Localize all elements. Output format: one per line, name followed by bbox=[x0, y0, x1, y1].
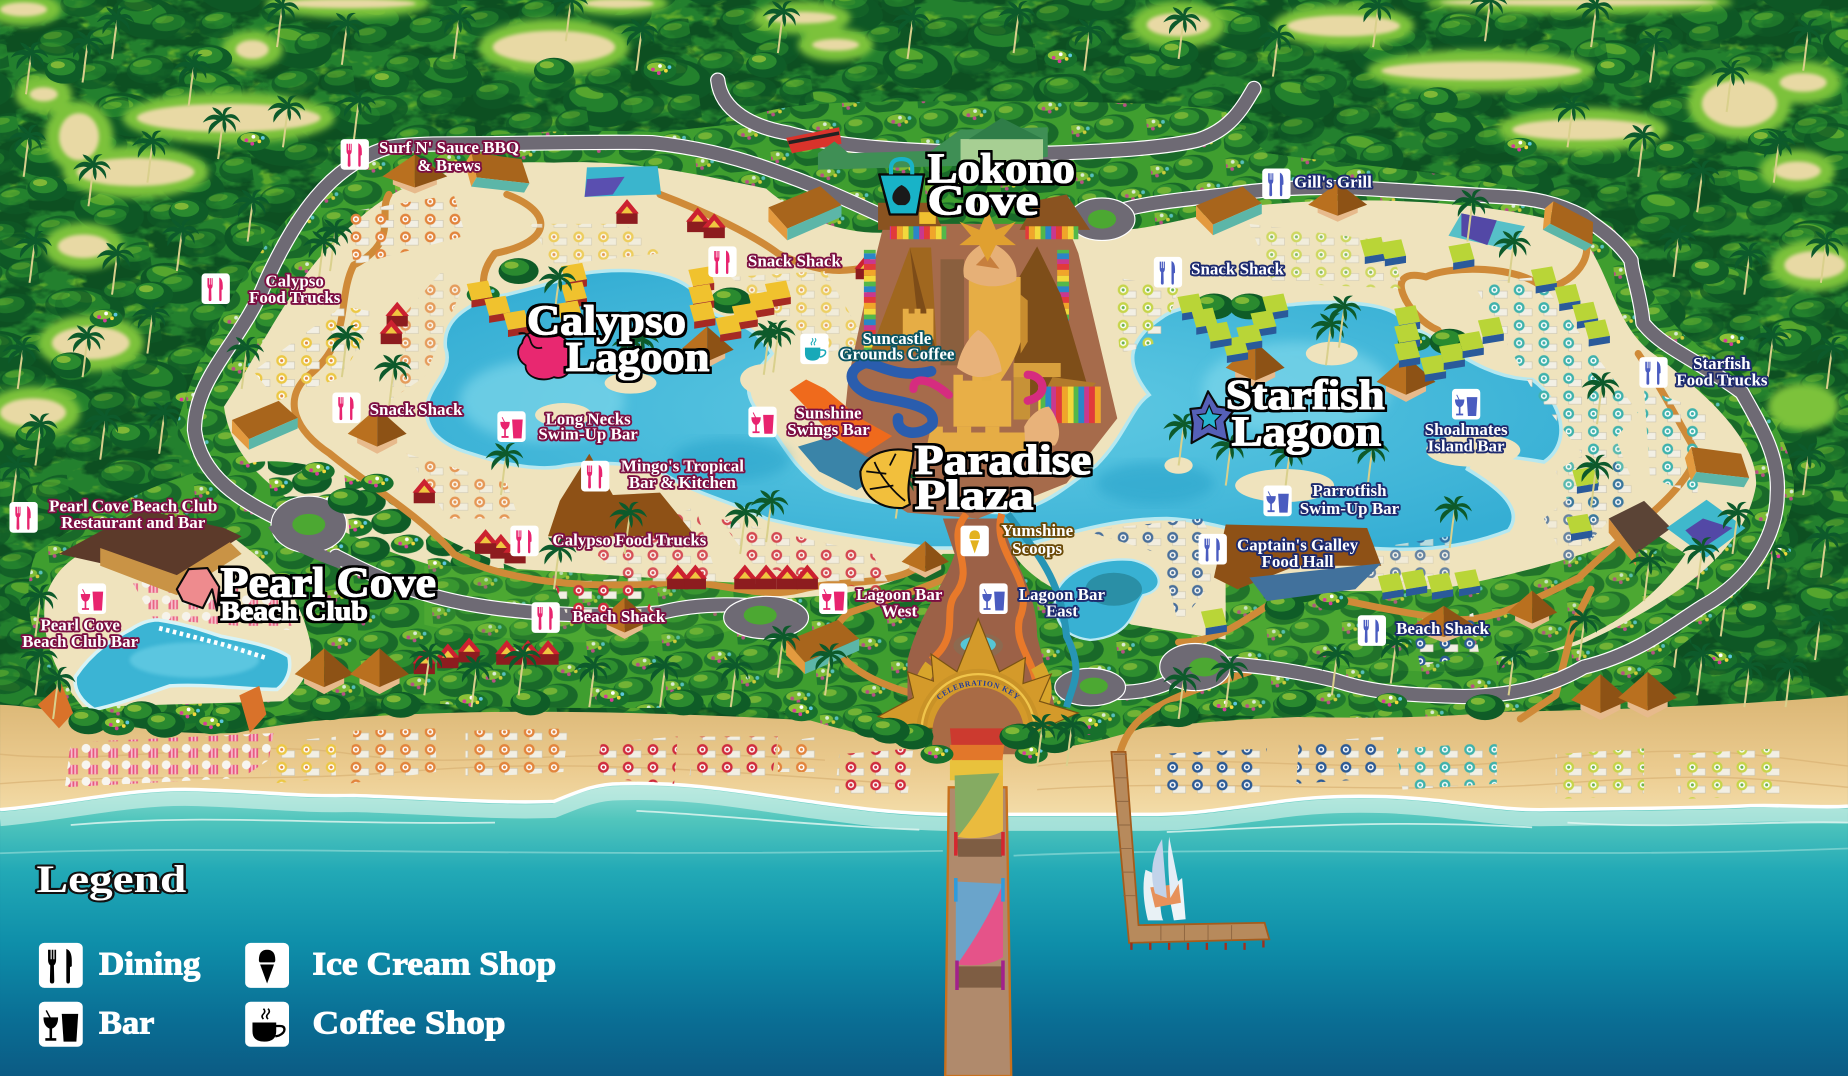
label: Beach Shack (west) bbox=[532, 602, 666, 633]
shade sail: blue and pink bbox=[956, 878, 1003, 990]
title: Paradise Plaza bbox=[915, 437, 1091, 519]
Celebration Key sun arch: CELEBRATION KEY bbox=[937, 680, 1020, 699]
area badge icons bbox=[177, 159, 1235, 610]
label: Suncastle Grounds Coffee bbox=[800, 329, 955, 364]
Mingo's and food hall roofs bbox=[548, 454, 695, 536]
legend item: coffee shop bbox=[245, 1002, 506, 1047]
label: Suncastle Grounds Coffee: Suncastle bbox=[862, 329, 932, 348]
lime overwater cabanas bbox=[1262, 293, 1288, 321]
icon: pearl shell bbox=[177, 568, 219, 610]
surf foam line bbox=[0, 783, 1848, 856]
label: Shoalmates Island Bar bbox=[1425, 389, 1508, 455]
title: Paradise Plaza: Paradise bbox=[915, 437, 1091, 484]
sand plaza ground bbox=[224, 162, 1756, 657]
sunshine swings orange roof bbox=[790, 379, 892, 454]
label: Shoalmates Island Bar: Shoalmates bbox=[1425, 420, 1508, 439]
islands bbox=[535, 342, 1520, 502]
beach sand bbox=[0, 695, 1848, 819]
label: Long Necks Swim-Up Bar: Swim-Up Bar bbox=[538, 425, 638, 444]
title: Starfish Lagoon: Lagoon bbox=[1232, 408, 1381, 455]
label: Lagoon Bar West: West bbox=[881, 601, 918, 620]
label: Captain's Galley Food Hall: Captain's Galley bbox=[1237, 535, 1359, 554]
label: Mingo's Tropical Bar & Kitchen bbox=[581, 456, 744, 492]
label: Snack Shack (north): Snack Shack bbox=[748, 251, 841, 270]
label: Sunshine Swings Bar: Swings Bar bbox=[787, 420, 870, 439]
label: Mingo's Tropical Bar & Kitchen: Mingo's Tropical bbox=[621, 456, 744, 475]
legend item: coffee shop: Coffee Shop bbox=[312, 1006, 506, 1042]
catamaran bbox=[1144, 837, 1186, 920]
label: Beach Shack (east) bbox=[1358, 615, 1490, 646]
title: Pearl Cove Beach Club: Pearl Cove bbox=[220, 559, 436, 606]
label: Snack Shack (east): Snack Shack bbox=[1191, 260, 1284, 279]
icon: paradise leaf bbox=[860, 449, 913, 508]
yellow overwater cabanas bbox=[467, 280, 493, 308]
label: Mingo's Tropical Bar & Kitchen: Bar & Kitchen bbox=[629, 473, 737, 492]
label: Surf N' Sauce BBQ: & Brews bbox=[417, 156, 481, 175]
label: Yumshine Scoops: Yumshine bbox=[1001, 521, 1074, 540]
Pearl Cove restaurant bbox=[59, 509, 242, 577]
red beach cabanas bbox=[489, 534, 513, 559]
title: Lokono Cove: Cove bbox=[928, 177, 1038, 224]
umbrella and lounger fields around the lagoons bbox=[130, 194, 1709, 666]
legend item: dining: Dining bbox=[99, 947, 201, 983]
area titles bbox=[220, 146, 1385, 626]
sandy clearings among the jungle bbox=[0, 0, 1848, 438]
sports courts and small pools bbox=[585, 166, 1745, 640]
label: Pearl Cove Beach Club Restaurant: Restaurant and Bar bbox=[61, 513, 206, 532]
label: Pearl Cove Beach Club Restaurant: Pearl Cove Beach Club bbox=[49, 496, 217, 515]
label: Calypso Food Trucks (south) bbox=[510, 526, 707, 556]
legend title: Legend bbox=[37, 858, 187, 901]
legend item: bar bbox=[39, 1002, 154, 1047]
title: Calypso Lagoon bbox=[527, 298, 710, 381]
label: Yumshine Scoops: Scoops bbox=[1012, 539, 1063, 558]
label: Captain's Galley Food Hall bbox=[1199, 534, 1359, 571]
label: Lagoon Bar West: Lagoon Bar bbox=[856, 585, 943, 604]
label: Gill's Grill: Gill's Grill bbox=[1294, 172, 1372, 191]
label: Lagoon Bar West bbox=[819, 583, 943, 620]
label: Calypso Food Trucks (left): Calypso bbox=[265, 271, 324, 290]
legend item: ice cream shop bbox=[245, 943, 556, 988]
title: Starfish Lagoon bbox=[1226, 372, 1385, 455]
sandy walkways bbox=[294, 194, 1697, 754]
roundabouts with planted islands bbox=[271, 198, 1230, 706]
icon: starfish bbox=[1190, 391, 1235, 443]
label: Parrotfish Swim-Up Bar: Parrotfish bbox=[1312, 481, 1387, 500]
icon: lokono cove bag bbox=[879, 159, 924, 214]
perimeter road bbox=[194, 80, 1777, 697]
label: Pearl Cove Beach Club Restaurant bbox=[9, 496, 217, 533]
jungle hillside background bbox=[0, 0, 1848, 737]
legend bbox=[37, 858, 556, 1047]
Pearl Cove pool bbox=[75, 620, 290, 709]
water: Calypso and Starfish lagoons bbox=[426, 270, 1561, 549]
label: Lagoon Bar East bbox=[979, 583, 1105, 620]
label: Pearl Cove Beach Club Bar bbox=[22, 583, 139, 651]
Celebration Key sun arch bbox=[870, 617, 1106, 780]
central plaza with castle bbox=[790, 194, 1117, 731]
label: Lagoon Bar East: Lagoon Bar bbox=[1019, 585, 1105, 604]
long sandcastle roofs bbox=[870, 247, 937, 354]
title: Calypso Lagoon: Lagoon bbox=[566, 334, 710, 381]
bungalows and shacks bbox=[59, 136, 1758, 720]
label: Calypso Food Trucks (left) bbox=[202, 271, 341, 307]
label: Snack Shack (east) bbox=[1154, 257, 1284, 288]
legend item: ice cream shop: Ice Cream Shop bbox=[312, 947, 556, 983]
label: Snack Shack (west): Snack Shack bbox=[370, 400, 463, 419]
label: Gill's Grill bbox=[1262, 169, 1372, 199]
label: Sunshine Swings Bar: Sunshine bbox=[796, 403, 862, 422]
label: Shoalmates Island Bar: Island Bar bbox=[1428, 436, 1505, 455]
title: Lokono Cove: Lokono bbox=[928, 146, 1075, 193]
water slides bbox=[852, 363, 1042, 433]
label: Starfish Food Trucks: Food Trucks bbox=[1676, 370, 1768, 389]
castle towers bbox=[969, 277, 1021, 389]
legend item: bar: Bar bbox=[99, 1006, 154, 1042]
fountain bbox=[953, 633, 1003, 659]
coastal garden shrubs and rocks bbox=[38, 258, 1776, 750]
pearl cove sand bbox=[44, 530, 311, 707]
label: Surf N' Sauce BBQ: Surf N' Sauce BBQ bbox=[379, 138, 519, 157]
label: Captain's Galley Food Hall: Food Hall bbox=[1262, 552, 1334, 571]
label: Snack Shack (north) bbox=[708, 246, 841, 277]
main pier with shade sails bbox=[945, 773, 1011, 1076]
label: Pearl Cove Beach Club Bar: Pearl Cove bbox=[40, 616, 120, 635]
title: Lokono Cove bbox=[928, 146, 1075, 224]
label: Long Necks Swim-Up Bar bbox=[497, 409, 638, 444]
label: Lagoon Bar East: East bbox=[1046, 601, 1078, 620]
label: Yumshine Scoops bbox=[961, 521, 1074, 558]
legend item: dining bbox=[39, 943, 201, 988]
label: Calypso Food Trucks (south): Calypso Food Trucks bbox=[552, 531, 707, 550]
shade sail: green and yellow bbox=[955, 773, 1003, 857]
label: Long Necks Swim-Up Bar: Long Necks bbox=[545, 409, 631, 428]
title: Pearl Cove Beach Club: Beach Club bbox=[220, 596, 368, 626]
title: Paradise Plaza: Plaza bbox=[915, 472, 1034, 519]
jungle palm trees and bushes bbox=[0, 0, 1848, 672]
label: Parrotfish Swim-Up Bar bbox=[1263, 481, 1400, 518]
label: Sunshine Swings Bar bbox=[748, 403, 870, 439]
red shuttle bus and welcome building bbox=[786, 118, 1048, 170]
wooden dock bbox=[1111, 752, 1269, 950]
label: Beach Shack (east): Beach Shack bbox=[1396, 619, 1490, 638]
label: Starfish Food Trucks: Starfish bbox=[1693, 354, 1751, 373]
label: Pearl Cove Beach Club Bar: Beach Club Bar bbox=[22, 632, 139, 651]
resort grounds: green belt bbox=[28, 101, 1794, 754]
label: Beach Shack (west): Beach Shack bbox=[572, 607, 666, 626]
title: Starfish Lagoon: Starfish bbox=[1226, 372, 1385, 419]
label: Calypso Food Trucks (left): Food Trucks bbox=[249, 288, 341, 307]
label: Parrotfish Swim-Up Bar: Swim-Up Bar bbox=[1300, 499, 1400, 518]
label: Surf N' Sauce BBQ bbox=[341, 138, 519, 175]
beach umbrella sets bbox=[65, 728, 1780, 799]
icon: calypso hibiscus bbox=[518, 331, 570, 379]
grass beds around resort paths bbox=[242, 461, 1685, 672]
paved walkway to arch bbox=[908, 519, 1055, 707]
label: Snack Shack (west) bbox=[332, 392, 463, 423]
label: Suncastle Grounds Coffee: Grounds Coffee bbox=[839, 344, 955, 363]
ocean bbox=[0, 783, 1848, 1076]
title: Pearl Cove Beach Club bbox=[220, 559, 436, 626]
resort palm trees bbox=[20, 89, 1837, 766]
title: Calypso Lagoon: Calypso bbox=[527, 298, 686, 345]
label: Starfish Food Trucks bbox=[1639, 354, 1768, 389]
venue labels bbox=[9, 138, 1768, 651]
